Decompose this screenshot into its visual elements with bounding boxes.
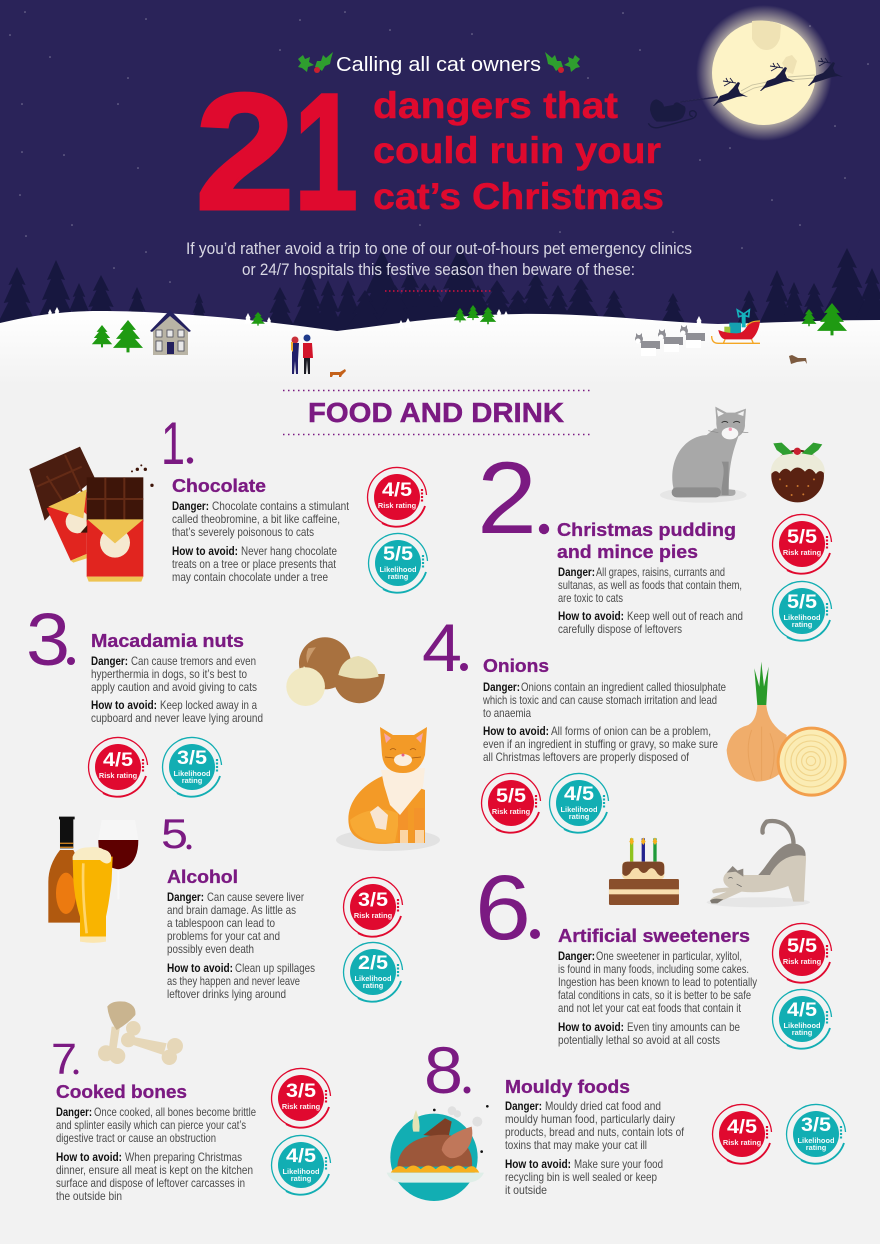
danger text: called theobromine, a bit like caffeine, (172, 513, 340, 526)
icon: birthday cake (609, 837, 679, 905)
how to avoid text: Keep locked away in a (160, 699, 257, 712)
danger text: and not let your cat eat foods that contain it (558, 1002, 742, 1015)
danger text: digestive tract or cause an obstruction (56, 1132, 216, 1145)
how to avoid text (558, 1021, 740, 1047)
danger text: a tablespoon can lead to (167, 917, 275, 930)
danger text: Can cause severe liver (207, 891, 304, 904)
title: Onions (483, 655, 549, 676)
title (557, 519, 736, 562)
likelihood badge 4/5: 4/5 (787, 1000, 817, 1021)
item 4: onions (422, 610, 847, 833)
how to avoid text (167, 962, 315, 1001)
likelihood badge 2/5: 2/5 (358, 953, 388, 974)
risk badge 5/5: 5/5 (496, 786, 526, 807)
item 5: alcohol (48, 810, 403, 1002)
likelihood badge 3/5 (163, 737, 222, 797)
how to avoid text: How to avoid: (172, 545, 238, 558)
big number 21: 2 (195, 60, 295, 245)
how to avoid text: Even tiny amounts can be (627, 1021, 740, 1034)
danger text: Ingestion has been known to lead to potentially (558, 976, 757, 989)
risk badge 3/5: 3/5 (286, 1081, 316, 1102)
danger text: Once cooked, all bones become brittle (94, 1106, 256, 1119)
red sleigh with presents (712, 310, 760, 343)
how to avoid text (172, 545, 337, 584)
number 8: 8 (424, 1033, 463, 1107)
likelihood badge 5/5: 5/5 (383, 544, 413, 565)
risk badge 5/5: Risk rating (492, 807, 531, 816)
danger text: are toxic to cats (558, 592, 623, 605)
number 5: 5 (161, 810, 188, 857)
item 1: chocolate (29, 410, 428, 593)
title: Mouldy foods (505, 1076, 630, 1097)
how to avoid text: Make sure your food (574, 1158, 663, 1171)
danger text: Danger: (558, 950, 595, 963)
house (150, 310, 191, 355)
title: Macadamia nuts (91, 630, 244, 651)
intro text: If you’d rather avoid a trip to one of our out-of-hours pet emergency clinics (186, 239, 692, 258)
likelihood badge 4/5: 4/5 (286, 1146, 316, 1167)
how to avoid text (505, 1158, 663, 1197)
danger text: products, bread and nuts, contain lots of (505, 1126, 685, 1139)
number 3: 3 (26, 598, 70, 681)
how to avoid text: Never hang chocolate (241, 545, 337, 558)
danger text: toxins that may make your cat ill (505, 1139, 647, 1152)
how to avoid text: Clean up spillages (235, 962, 315, 975)
how to avoid text: Keep well out of reach and (627, 610, 743, 623)
snowy hills (0, 311, 880, 385)
risk badge 5/5 (773, 514, 832, 574)
how to avoid text: even if an ingredient in stuffing or gravy, so make sure (483, 738, 718, 751)
how to avoid text: leftover drinks lying around (167, 988, 286, 1001)
subtitle: Calling all cat owners (336, 54, 541, 76)
risk badge 5/5 (773, 923, 832, 983)
likelihood badge 4/5: Likelihood (283, 1167, 320, 1176)
small snow trees (47, 307, 703, 328)
likelihood badge 4/5: 4/5 (564, 784, 594, 805)
intro text (186, 239, 692, 279)
likelihood badge 5/5: rating (388, 572, 409, 581)
huskies (635, 325, 705, 356)
how to avoid text (91, 699, 263, 725)
icon: onions (727, 662, 847, 797)
risk badge 4/5: 4/5 (103, 750, 133, 771)
danger text: Danger: (172, 500, 209, 513)
risk badge 5/5 (482, 773, 540, 833)
risk badge 5/5: Risk rating (783, 548, 822, 557)
likelihood badge 2/5: Likelihood (355, 974, 392, 983)
danger text: All grapes, raisins, currants and (596, 566, 725, 579)
how to avoid text: How to avoid: (558, 1021, 624, 1034)
item 2: christmas pudding (477, 407, 832, 641)
big number 21 (195, 60, 358, 245)
danger text: and brain damage. As little as (167, 904, 296, 917)
icon: bones (98, 1001, 183, 1065)
icon: orange cat (336, 727, 440, 851)
how to avoid text: When preparing Christmas (125, 1151, 242, 1164)
how to avoid text: How to avoid: (483, 725, 549, 738)
how to avoid text: How to avoid: (505, 1158, 571, 1171)
green fir trees (92, 303, 847, 352)
likelihood badge 4/5: rating (569, 812, 590, 821)
risk badge 4/5 (368, 467, 426, 527)
danger text: to anaemia (483, 707, 531, 720)
item 3: macadamia nuts (26, 598, 440, 851)
title: Chocolate (172, 475, 266, 496)
title: Artificial sweeteners (558, 925, 750, 946)
danger text (56, 1106, 256, 1145)
how to avoid text: carefully dispose of leftovers (558, 623, 682, 636)
likelihood badge 5/5 (773, 581, 832, 641)
title: Christmas pudding (557, 519, 736, 540)
likelihood badge 3/5 (787, 1104, 846, 1164)
title: Alcohol (167, 866, 238, 887)
main title: cat’s Christmas (373, 176, 664, 217)
danger text: and splinter easily which can pierce your cat’s (56, 1119, 246, 1132)
likelihood badge 3/5: Likelihood (798, 1136, 835, 1145)
danger text (558, 950, 757, 1015)
item 8: mouldy foods (387, 1033, 846, 1201)
risk badge 3/5 (344, 877, 402, 937)
danger text: Can cause tremors and even (131, 655, 256, 668)
couple walking dog (291, 334, 346, 377)
likelihood badge 4/5: rating (792, 1028, 813, 1037)
risk badge 4/5 (713, 1104, 772, 1164)
risk badge 3/5: Risk rating (282, 1102, 321, 1111)
likelihood badge 4/5 (272, 1135, 330, 1195)
stars (9, 11, 869, 283)
night sky header (0, 0, 880, 345)
danger text: sultanas, as well as foods that contain them, (558, 579, 742, 592)
icon: christmas pudding (771, 443, 825, 502)
how to avoid text: may contain chocolate under a tree (172, 571, 328, 584)
number 4: 4 (422, 610, 462, 686)
number 2: 2 (477, 441, 537, 555)
likelihood badge 5/5: 5/5 (787, 592, 817, 613)
how to avoid text: recycling bin is well sealed or keep (505, 1171, 657, 1184)
how to avoid text: How to avoid: (167, 962, 233, 975)
danger text: One sweetener in particular, xylitol, (596, 950, 742, 963)
likelihood badge 5/5: Likelihood (380, 565, 417, 574)
section heading: FOOD AND DRINK (308, 397, 564, 428)
risk badge 4/5: Risk rating (99, 771, 138, 780)
how to avoid text: All forms of onion can be a problem, (551, 725, 711, 738)
risk badge 5/5: 5/5 (787, 527, 817, 548)
likelihood badge 5/5: Likelihood (784, 613, 821, 622)
pine forest (0, 247, 880, 352)
risk badge 5/5: 5/5 (787, 936, 817, 957)
main title (373, 85, 664, 217)
likelihood badge 4/5 (550, 773, 608, 833)
risk badge 4/5: 4/5 (382, 480, 412, 501)
danger text: mouldy human food, particularly dairy (505, 1113, 675, 1126)
danger text: hyperthermia in dogs, so it’s best to (91, 668, 247, 681)
item 6: artificial sweeteners (475, 821, 832, 1049)
risk badge 3/5 (272, 1068, 330, 1128)
danger text (482, 681, 726, 720)
risk badge 3/5: Risk rating (354, 911, 393, 920)
title: Cooked bones (56, 1081, 187, 1102)
icon: macadamia nuts (286, 637, 385, 706)
likelihood badge 3/5: Likelihood (174, 769, 211, 778)
stray cat in snow (789, 355, 807, 364)
danger text (167, 891, 304, 956)
number 7: 7 (51, 1035, 77, 1084)
how to avoid text: surface and dispose of leftover carcasses in (56, 1177, 245, 1190)
danger text: that’s severely poisonous to cats (172, 526, 314, 539)
danger text: Danger: (91, 655, 128, 668)
likelihood badge 3/5: rating (806, 1143, 827, 1152)
danger text: possibly even death (167, 943, 254, 956)
danger text: problems for your cat and (167, 930, 280, 943)
danger text: fatal conditions in cats, so it is better to be safe (558, 989, 751, 1002)
likelihood badge 3/5: rating (182, 776, 203, 785)
icon: stretching cat (707, 821, 810, 907)
risk badge 4/5: 4/5 (727, 1117, 757, 1138)
how to avoid text: as they happen and never leave (167, 975, 300, 988)
danger text: Danger: (56, 1106, 92, 1119)
danger text: Danger: (505, 1100, 542, 1113)
danger text: is found in many foods, including some cakes. (558, 963, 749, 976)
risk badge 5/5: Risk rating (783, 957, 822, 966)
how to avoid text: treats on a tree or place presents that (172, 558, 337, 571)
number 1: 1 (161, 410, 185, 477)
how to avoid text: it outside (505, 1184, 547, 1197)
big number 21: 1 (294, 60, 358, 245)
section heading (283, 390, 590, 434)
how to avoid text: dinner, ensure all meat is kept on the kitchen (56, 1164, 253, 1177)
how to avoid text: potentially lethal so avoid at all costs (558, 1034, 720, 1047)
santa sleigh and reindeer silhouette (648, 58, 843, 128)
how to avoid text: How to avoid: (91, 699, 157, 712)
icon: drinks (48, 817, 138, 943)
likelihood badge 5/5 (369, 533, 428, 593)
how to avoid text (56, 1151, 253, 1203)
risk badge 4/5 (89, 737, 148, 797)
danger text (558, 566, 742, 605)
likelihood badge 5/5: rating (792, 620, 813, 629)
likelihood badge 4/5: Likelihood (561, 805, 598, 814)
main title: dangers that (373, 85, 618, 126)
danger text: which is toxic and can cause stomach irritation and lead (482, 694, 717, 707)
icon: grey cat (660, 407, 748, 503)
how to avoid text: How to avoid: (56, 1151, 122, 1164)
danger text (505, 1100, 685, 1152)
number 6: 6 (475, 857, 531, 959)
likelihood badge 2/5 (344, 942, 402, 1002)
danger text (91, 655, 257, 694)
danger text: Danger: (558, 566, 595, 579)
risk badge 4/5: Risk rating (723, 1138, 762, 1147)
danger text: apply caution and avoid giving to cats (91, 681, 257, 694)
how to avoid text: cupboard and never leave lying around (91, 712, 263, 725)
icon: chocolate bars (29, 447, 154, 582)
risk badge 3/5: 3/5 (358, 890, 388, 911)
main title: could ruin your (373, 130, 661, 171)
item 7: cooked bones (51, 1001, 330, 1203)
likelihood badge 3/5: 3/5 (177, 748, 207, 769)
how to avoid text (483, 725, 718, 764)
how to avoid text: How to avoid: (558, 610, 624, 623)
danger text (172, 500, 350, 539)
how to avoid text: the outside bin (56, 1190, 122, 1203)
holly right (545, 52, 580, 73)
title: and mince pies (557, 541, 698, 562)
danger text: Onions contain an ingredient called thiosulphate (521, 681, 726, 694)
likelihood badge 4/5: Likelihood (784, 1021, 821, 1030)
danger text: Mouldy dried cat food and (545, 1100, 661, 1113)
how to avoid text (558, 610, 743, 636)
holly left (298, 52, 333, 73)
intro text: or 24/7 hospitals this festive season then beware of these: (242, 260, 635, 279)
icon: mouldy turkey (387, 1105, 489, 1201)
risk badge 4/5: Risk rating (378, 501, 417, 510)
how to avoid text: all Christmas leftovers are properly disposed of (483, 751, 690, 764)
danger text: Danger: (167, 891, 204, 904)
danger text: Chocolate contains a stimulant (212, 500, 350, 513)
likelihood badge 3/5: 3/5 (801, 1115, 831, 1136)
moon (696, 5, 832, 141)
likelihood badge 4/5 (773, 989, 832, 1049)
likelihood badge 2/5: rating (363, 981, 384, 990)
likelihood badge 4/5: rating (291, 1174, 312, 1183)
danger text: Danger: (483, 681, 520, 694)
